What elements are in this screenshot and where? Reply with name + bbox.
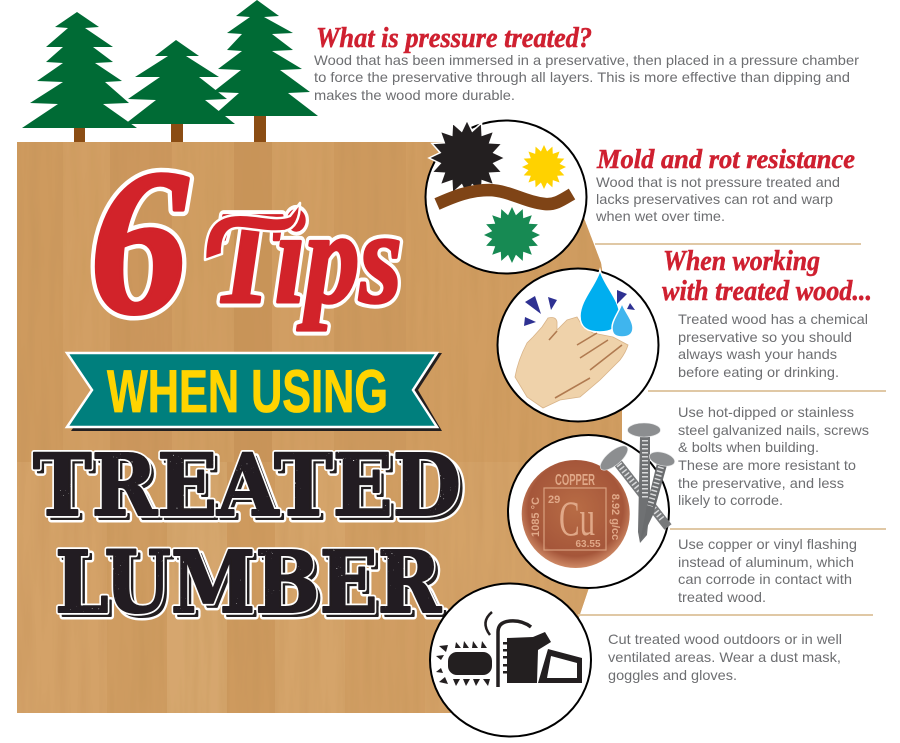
tip: nails: the preservative, and less	[678, 475, 844, 491]
banner shadow	[71, 353, 442, 431]
section: mold and rot resistance	[595, 144, 855, 224]
word LUMBER: LUMBER	[55, 533, 442, 633]
icon: copper coin: 1085 °C	[530, 497, 542, 537]
word TREATED: TREATED	[33, 436, 461, 536]
text block	[595, 174, 840, 224]
tip: cutting: goggles and gloves.	[608, 667, 737, 683]
icon: copper coin: Cu	[559, 490, 595, 546]
circle: chainsaw	[430, 584, 591, 736]
text block: to force the preservative through all layers. This is more effective than dipping and	[314, 69, 850, 85]
section: what is pressure treated	[314, 23, 859, 103]
tip: flashing: instead of aluminum, which	[678, 554, 854, 570]
text block: Wood that has been immersed in a preservative, then placed in a pressure chamber	[314, 52, 859, 68]
tip: flashing: can corrode in contact with	[678, 571, 852, 587]
tip: nails: likely to corrode.	[678, 492, 783, 508]
word TREATED: TREATED	[33, 436, 461, 536]
tree 2	[125, 40, 235, 142]
icon: copper coin	[522, 460, 630, 568]
tip: wash hands	[678, 311, 868, 380]
text block	[314, 52, 859, 103]
heading: treated lumber	[33, 436, 465, 637]
word Tips: Tips	[212, 184, 402, 331]
word LUMBER: LUMBER	[59, 537, 446, 637]
wood panel	[17, 142, 627, 713]
tree 3	[213, 0, 318, 142]
word TREATED: TREATED	[37, 440, 465, 540]
icon: chainsaw	[436, 612, 582, 687]
tree 1	[22, 12, 137, 142]
tip: cutting: ventilated areas. Wear a dust mask,	[608, 649, 841, 665]
tip: flashing: treated wood.	[678, 589, 766, 605]
icon: copper coin: COPPER	[555, 472, 595, 489]
heading: with treated wood...	[662, 276, 872, 307]
tip: flashing	[678, 536, 857, 605]
text block: when wet over time.	[595, 208, 725, 224]
word LUMBER: LUMBER	[59, 537, 446, 637]
tip: nails: steel galvanized nails, screws	[678, 422, 869, 438]
word LUMBER: LUMBER	[55, 533, 442, 633]
icon: water drops	[580, 270, 633, 337]
tip: nails: & bolts when building.	[678, 439, 819, 455]
icon: black mold burst	[429, 120, 505, 196]
circle: wash hands	[498, 268, 658, 422]
tip: flashing: Use copper or vinyl flashing	[678, 536, 857, 552]
icon: nails	[596, 423, 676, 543]
tip: nails: Use hot-dipped or stainless	[678, 404, 854, 420]
tip: nails: These are more resistant to	[678, 457, 856, 473]
numeral 6: 6	[90, 127, 188, 357]
icon: green burst	[484, 207, 540, 263]
tip: cutting	[608, 631, 842, 683]
heading: When working	[663, 246, 820, 277]
heading: What is pressure treated?	[316, 23, 592, 54]
text block: makes the wood more durable.	[314, 87, 515, 103]
trees	[22, 0, 318, 142]
icon: copper coin: 63.55	[575, 539, 601, 550]
circle: mold and rot	[426, 120, 586, 274]
heading	[662, 246, 872, 307]
tip: wash hands: before eating or drinking.	[678, 364, 839, 380]
banner: when using	[67, 353, 442, 431]
banner text: WHEN USING	[107, 358, 388, 425]
word TREATED: TREATED	[37, 440, 465, 540]
icon: copper coin: 29	[548, 494, 560, 506]
text block: Wood that is not pressure treated and	[596, 174, 840, 190]
icon: yellow burst	[522, 145, 566, 189]
icon: copper coin: 8.92 g/cc	[609, 494, 621, 540]
icon: wood wave	[437, 190, 572, 204]
word Tips: Tips	[212, 184, 402, 331]
tip: wash hands: preservative so you should	[678, 329, 852, 345]
tip: nails	[678, 404, 869, 508]
icon: hands	[515, 317, 628, 408]
heading: 6 Tips	[90, 127, 402, 357]
numeral 6: 6	[90, 127, 188, 357]
banner ribbon	[67, 353, 437, 427]
dividers	[578, 243, 886, 616]
tip: wash hands: always wash your hands	[678, 346, 837, 362]
icon: blue splashes	[524, 290, 635, 326]
section: when working with treated wood	[608, 246, 872, 683]
circle: copper and nails	[508, 423, 676, 588]
tip: wash hands: Treated wood has a chemical	[678, 311, 868, 327]
tip: cutting: Cut treated wood outdoors or in well	[608, 631, 842, 647]
text block: lacks preservatives can rot and warp	[596, 191, 833, 207]
heading: Mold and rot resistance	[596, 144, 855, 174]
